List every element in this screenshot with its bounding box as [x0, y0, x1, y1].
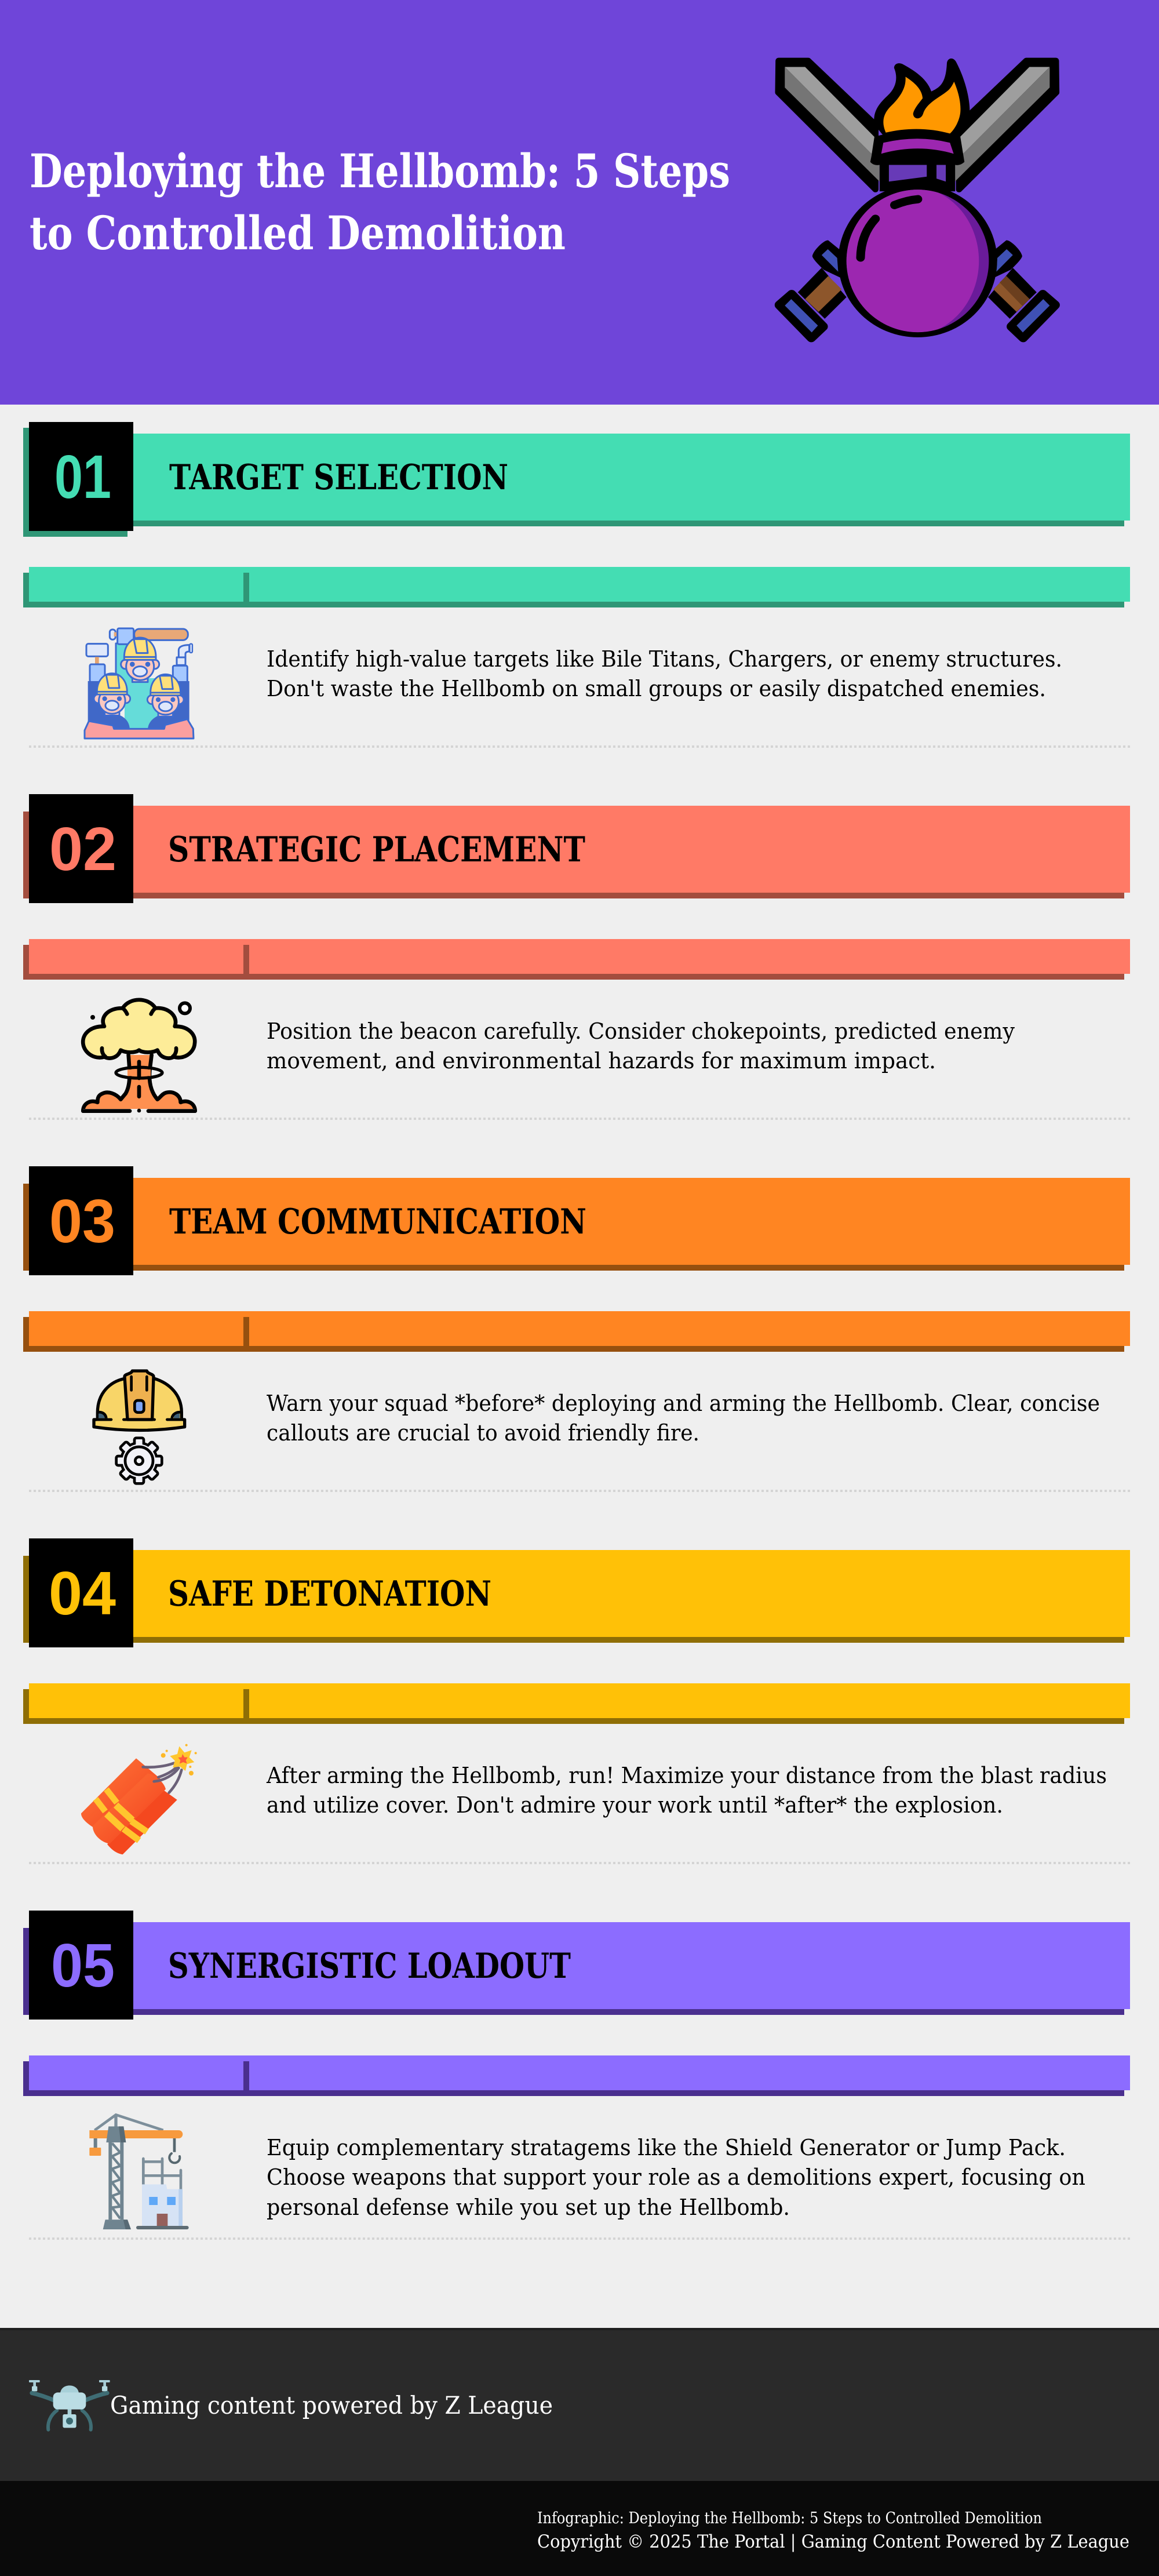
icon: dynamite [81, 1744, 197, 1854]
icon: tower crane and building [89, 2115, 189, 2229]
number badge [29, 1538, 133, 1647]
step 5: synergistic loadout [23, 1911, 1130, 2239]
header banner [0, 0, 1159, 405]
body text [267, 2135, 1085, 2220]
body text: Choose weapons that support your role as a demolitions expert, focusing on [267, 2164, 1085, 2190]
header bar [23, 1550, 1130, 1643]
collar [870, 130, 964, 165]
heading: STRATEGIC PLACEMENT [168, 829, 585, 870]
number badge [29, 1166, 133, 1275]
body text: and utilize cover. Don't admire your work until *after* the explosion. [267, 1792, 1003, 1818]
heading: SAFE DETONATION [168, 1574, 491, 1614]
body text [266, 1763, 1107, 1818]
sponsor text: Gaming content powered by Z League [110, 2391, 553, 2419]
body text: callouts are crucial to avoid friendly fire. [267, 1420, 699, 1446]
number badge [23, 422, 133, 537]
body text: Don't waste the Hellbomb on small groups or easily dispatched enemies. [267, 676, 1046, 701]
neck [880, 156, 955, 191]
number badge: 03 [49, 1187, 115, 1256]
heading: TEAM COMMUNICATION [169, 1202, 586, 1242]
step 1: target selection [23, 422, 1130, 747]
title [30, 144, 730, 260]
icon: hard hat and gear [94, 1371, 185, 1483]
body text: movement, and environmental hazards for maximum impact. [267, 1048, 936, 1074]
number badge [29, 1911, 133, 2020]
header bar [23, 1178, 1130, 1271]
heading: SYNERGISTIC LOADOUT [168, 1946, 571, 1986]
icon: drone [29, 2380, 110, 2430]
icon: construction workers [85, 628, 194, 738]
copyright: Copyright © 2025 The Portal | Gaming Content Powered by Z League [537, 2531, 1129, 2552]
icon: hellbomb with crossed swords [778, 59, 1056, 338]
body text: personal defense while you set up the Hellbomb. [267, 2195, 790, 2220]
header bar [23, 806, 1130, 898]
number badge: 01 [54, 443, 111, 511]
body text: After arming the Hellbomb, run! Maximize your distance from the blast radius [266, 1763, 1107, 1788]
footer title: Infographic: Deploying the Hellbomb: 5 Steps to Controlled Demolition [537, 2509, 1042, 2527]
header bar [23, 434, 1130, 526]
number badge: 02 [49, 815, 116, 883]
sub bar [23, 2055, 1130, 2096]
sub bar [23, 939, 1130, 980]
footer [0, 2481, 1159, 2576]
step 4: safe detonation [23, 1538, 1130, 1863]
sub bar [23, 567, 1130, 607]
number badge: 04 [49, 1559, 116, 1628]
body text: Warn your squad *before* deploying and arming the Hellbomb. Clear, concise [267, 1391, 1100, 1416]
body text [267, 646, 1062, 701]
title: to Controlled Demolition [30, 206, 566, 260]
title: Deploying the Hellbomb: 5 Steps [30, 144, 730, 198]
sub bar [23, 1311, 1130, 1352]
header bar [23, 1922, 1130, 2015]
number badge [29, 794, 133, 903]
step 3: team communication [23, 1166, 1130, 1491]
icon: mushroom cloud [83, 1000, 195, 1112]
heading: TARGET SELECTION [169, 457, 508, 498]
body text: Position the beacon carefully. Consider chokepoints, predicted enemy [267, 1018, 1015, 1044]
bomb sphere [838, 184, 997, 337]
flame [874, 59, 970, 139]
body text: Identify high-value targets like Bile Titans, Chargers, or enemy structures. [267, 646, 1062, 672]
sub bar [23, 1683, 1130, 1724]
number badge: 05 [51, 1931, 115, 2000]
body text: Equip complementary stratagems like the Shield Generator or Jump Pack. [267, 2135, 1066, 2160]
body text [267, 1391, 1100, 1446]
step 2: strategic placement [23, 794, 1130, 1119]
right hilt [988, 268, 1037, 319]
left hilt [798, 268, 847, 319]
body text [267, 1018, 1015, 1074]
sponsor band [0, 2328, 1159, 2481]
